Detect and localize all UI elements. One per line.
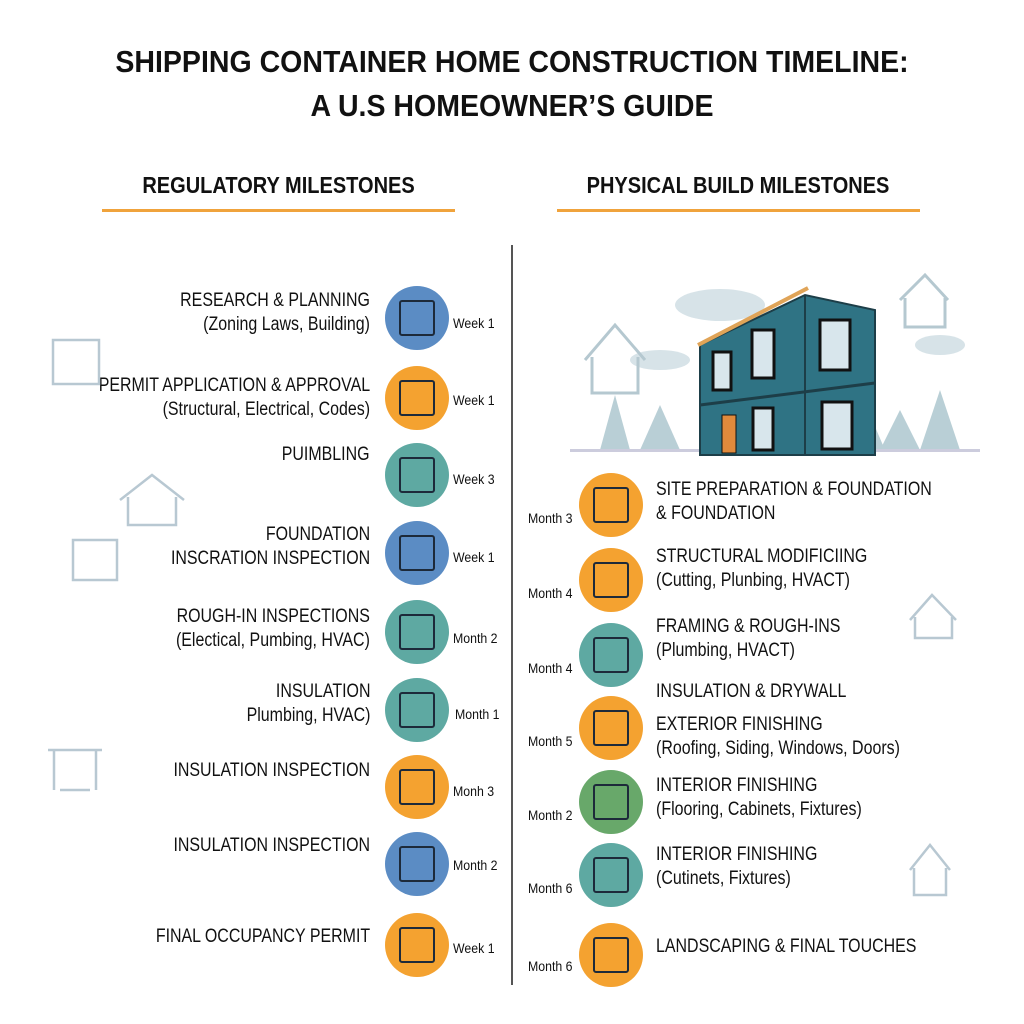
item: interior [528, 770, 862, 834]
item: permit: Week 1 [453, 392, 495, 408]
item: insulation drywall / exterior: (Roofing, Siding, Windows, Doors) [656, 738, 900, 759]
item: insulation inspection 2: Month 2 [453, 857, 498, 873]
item: insulation drywall / exterior: Month 5 [528, 733, 573, 749]
item: rough-in: Month 2 [453, 630, 498, 646]
item: framing: Month 4 [528, 660, 573, 676]
item: plumbing: PUIMBLING [282, 444, 370, 465]
item: insulation: Plumbing, HVAC) [246, 705, 370, 726]
item: site prep: Month 3 [528, 510, 573, 526]
item: final [156, 913, 495, 977]
title [115, 44, 909, 123]
item: research: (Zoning Laws, Building) [203, 314, 370, 335]
item: framing: (Plumbing, HVACT) [656, 640, 795, 661]
item: interior: INTERIOR FINISHING [656, 775, 817, 796]
item: structural: STRUCTURAL MODIFICIING [656, 546, 867, 567]
item: insulation inspection: INSULATION INSPECTION [173, 760, 370, 781]
item: insulation inspection 2 [173, 832, 498, 896]
item: interior: (Flooring, Cabinets, Fixtures) [656, 799, 862, 820]
heading: regulatory: REGULATORY MILESTONES [142, 172, 415, 198]
item: structural [528, 546, 867, 612]
heading: regulatory [102, 172, 455, 212]
item: interior: Month 2 [528, 807, 573, 823]
heading: physical [557, 172, 920, 212]
item: insulation drywall / exterior [528, 681, 900, 760]
item: final: FINAL OCCUPANCY PERMIT [156, 926, 370, 947]
item: final: Week 1 [453, 940, 495, 956]
item: insulation [246, 678, 500, 742]
item: rough-in: (Electical, Pumbing, HVAC) [176, 630, 370, 651]
item: foundation: Week 1 [453, 549, 495, 565]
item: research: Week 1 [453, 315, 495, 331]
decorative side icons [48, 338, 185, 792]
item: structural: (Cutting, Plunbing, HVACT) [656, 570, 850, 591]
item: permit [99, 366, 495, 430]
item: foundation: INSCRATION INSPECTION [171, 548, 370, 569]
item: site prep: SITE PREPARATION & FOUNDATION [656, 479, 932, 500]
item: rough-in: ROUGH-IN INSPECTIONS [177, 606, 370, 627]
item: framing: FRAMING & ROUGH-INS [656, 616, 840, 637]
item: landscaping [528, 923, 916, 987]
item: insulation drywall / exterior: EXTERIOR FINISHING [656, 714, 823, 735]
item: site prep [528, 473, 932, 537]
item: interior 2: (Cutinets, Fixtures) [656, 868, 791, 889]
item: permit: (Structural, Electrical, Codes) [162, 399, 370, 420]
item: rough-in [176, 600, 498, 664]
item: foundation: FOUNDATION [266, 524, 370, 545]
item: permit: PERMIT APPLICATION & APPROVAL [99, 375, 370, 396]
item: landscaping: Month 6 [528, 958, 573, 974]
item: insulation: INSULATION [275, 681, 370, 702]
item: plumbing: Week 3 [453, 471, 495, 487]
item: structural: Month 4 [528, 585, 573, 601]
title: SHIPPING CONTAINER HOME CONSTRUCTION TIMELINE: [115, 44, 909, 79]
item: insulation inspection 2: INSULATION INSPECTION [173, 835, 370, 856]
item: insulation inspection [173, 755, 494, 819]
heading: physical: PHYSICAL BUILD MILESTONES [587, 172, 890, 198]
item: plumbing [282, 443, 495, 507]
title: A U.S HOMEOWNER’S GUIDE [310, 88, 713, 123]
item: research [180, 286, 495, 350]
item: insulation inspection: Monh 3 [453, 783, 494, 799]
illustration: container home [570, 273, 980, 456]
item: site prep: & FOUNDATION [656, 503, 775, 524]
text: INSULATION & DRYWALL [656, 681, 846, 702]
item: insulation: Month 1 [455, 706, 500, 722]
item: landscaping: LANDSCAPING & FINAL TOUCHES [656, 936, 916, 957]
item: interior 2 [528, 843, 817, 907]
item: interior 2: INTERIOR FINISHING [656, 844, 817, 865]
item: framing [528, 616, 840, 687]
item: interior 2: Month 6 [528, 880, 573, 896]
item: research: RESEARCH & PLANNING [180, 290, 370, 311]
item: foundation [171, 521, 495, 585]
